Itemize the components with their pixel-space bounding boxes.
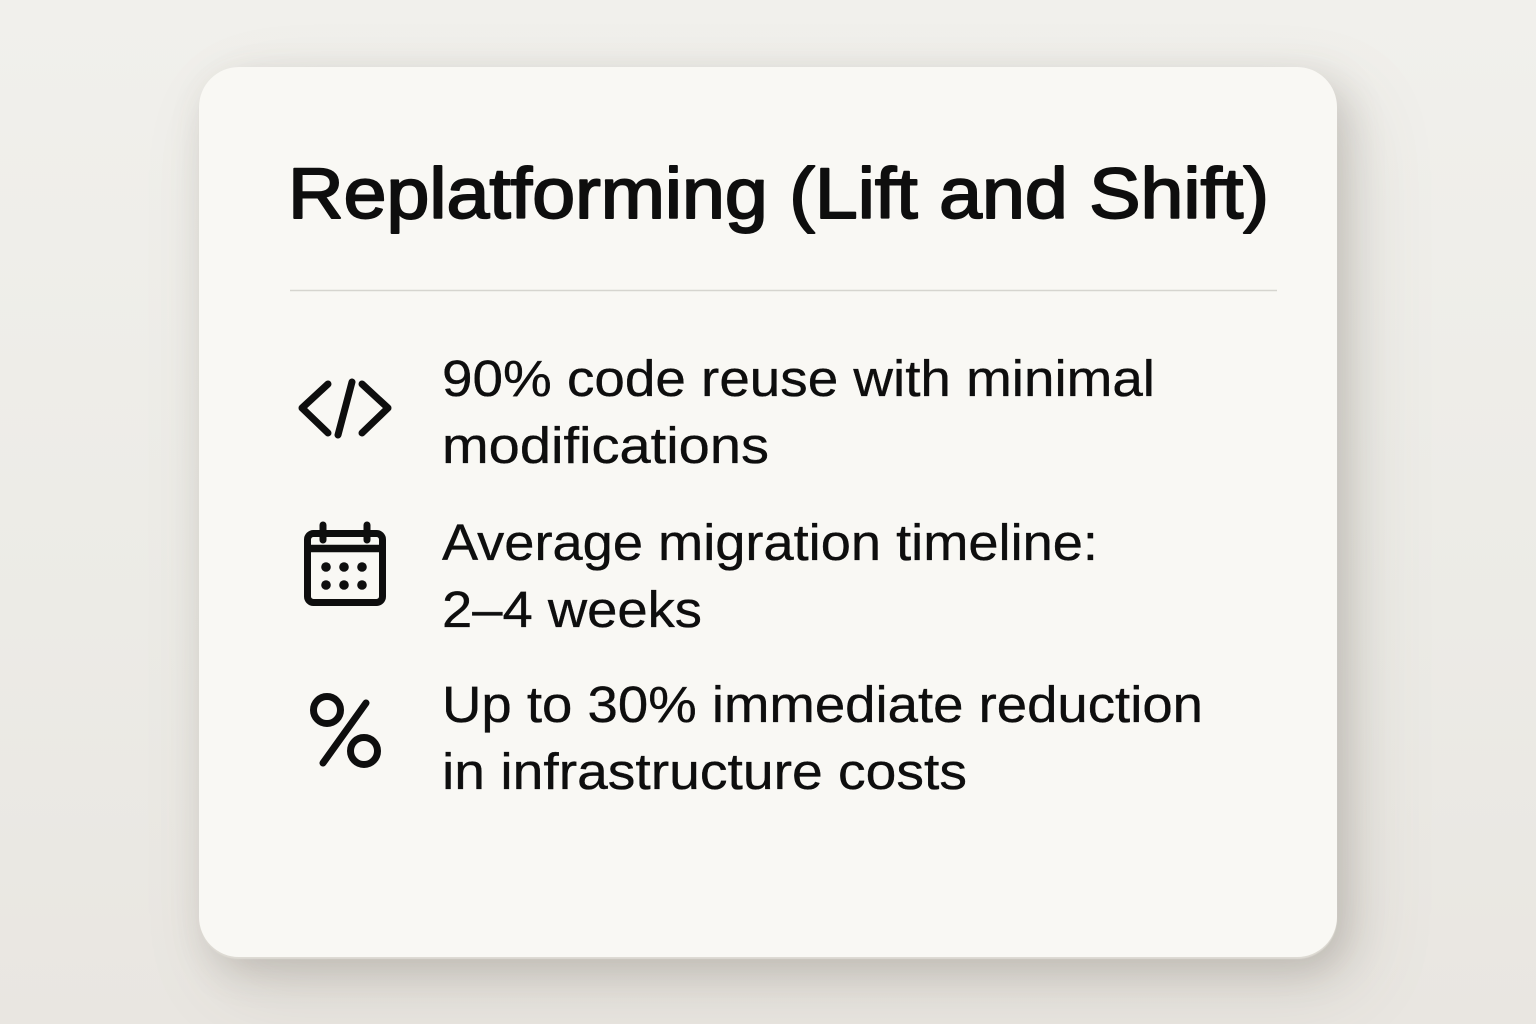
icon: code brackets bbox=[302, 382, 388, 435]
text: code reuse bbox=[442, 350, 1155, 474]
text: cost reduction bbox=[442, 676, 1203, 800]
text: migration timeline: Average migration timeline: bbox=[442, 514, 1098, 571]
text: cost reduction: Up to 30% immediate reduction bbox=[442, 676, 1203, 733]
text: cost reduction: in infrastructure costs bbox=[442, 743, 967, 800]
icon: percent bbox=[314, 696, 378, 764]
panel: card bbox=[199, 67, 1337, 957]
text: migration timeline bbox=[442, 514, 1098, 638]
title: Replatforming (Lift and Shift) bbox=[288, 155, 1269, 234]
icon: calendar bbox=[307, 525, 383, 602]
text: code reuse: modifications bbox=[442, 417, 769, 474]
text: code reuse: 90% code reuse with minimal bbox=[442, 350, 1155, 407]
text: migration timeline: 2–4 weeks bbox=[442, 581, 702, 638]
